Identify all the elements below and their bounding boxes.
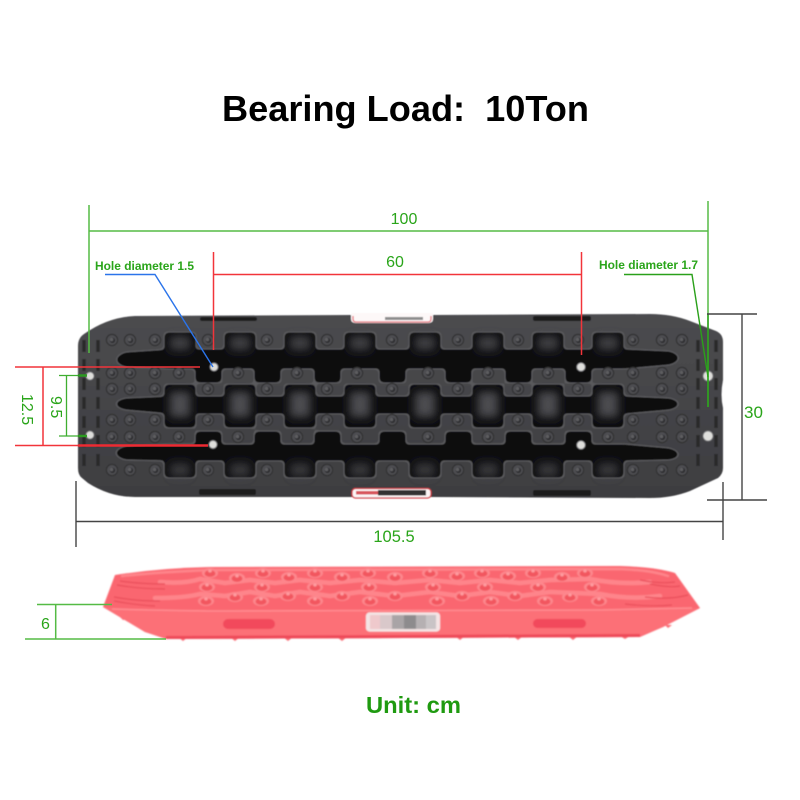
dimension: 12.5: 12.5	[18, 394, 35, 425]
board body	[78, 314, 723, 498]
red traction board side view	[103, 566, 700, 641]
bottom spikes	[120, 617, 672, 641]
grip slots	[199, 316, 591, 496]
title: Bearing Load: 10Ton	[222, 88, 589, 129]
unit note: Unit: cm	[366, 692, 461, 718]
dimension: width 30: 30	[744, 403, 763, 422]
red board body	[103, 566, 700, 639]
dimension: width 30	[707, 314, 767, 500]
dark channels	[116, 333, 678, 477]
callout: hole diameter 1.7: Hole diameter 1.7	[599, 258, 698, 272]
channel rim	[116, 333, 678, 477]
top logo plate	[351, 313, 433, 323]
dimension: inner hole span 60	[213, 252, 582, 355]
black traction board	[78, 313, 723, 498]
front edge highlight	[112, 608, 692, 611]
dimension: overall hole span 100: 100	[391, 211, 417, 228]
callout: hole diameter 1.5	[95, 259, 213, 367]
dimension: height 6: 6	[41, 616, 50, 633]
dimension: 12.5	[15, 367, 208, 446]
bumps	[198, 568, 607, 606]
blurred label plate	[366, 613, 440, 631]
dimension: height 6	[25, 604, 166, 639]
callout: hole diameter 1.5: Hole diameter 1.5	[95, 259, 194, 273]
dimension: length 105.5	[76, 481, 723, 547]
side slots	[223, 619, 586, 629]
bottom shadow	[166, 634, 640, 639]
end dashes	[84, 340, 716, 472]
dimension: inner hole span 60: 60	[386, 254, 404, 271]
dimension: overall hole span 100	[89, 201, 708, 407]
dimension: 9.5: 9.5	[47, 396, 64, 418]
callout: hole diameter 1.7	[599, 258, 708, 377]
mounting holes	[86, 363, 713, 449]
stud rows	[106, 334, 688, 476]
bottom logo plate	[352, 488, 431, 498]
front face	[103, 607, 700, 638]
surface ridges	[122, 569, 668, 598]
dimension: length 105.5: 105.5	[373, 528, 415, 546]
tip grooves	[114, 580, 688, 606]
channel floor highlights	[170, 336, 618, 477]
dimension: 9.5	[47, 376, 87, 436]
